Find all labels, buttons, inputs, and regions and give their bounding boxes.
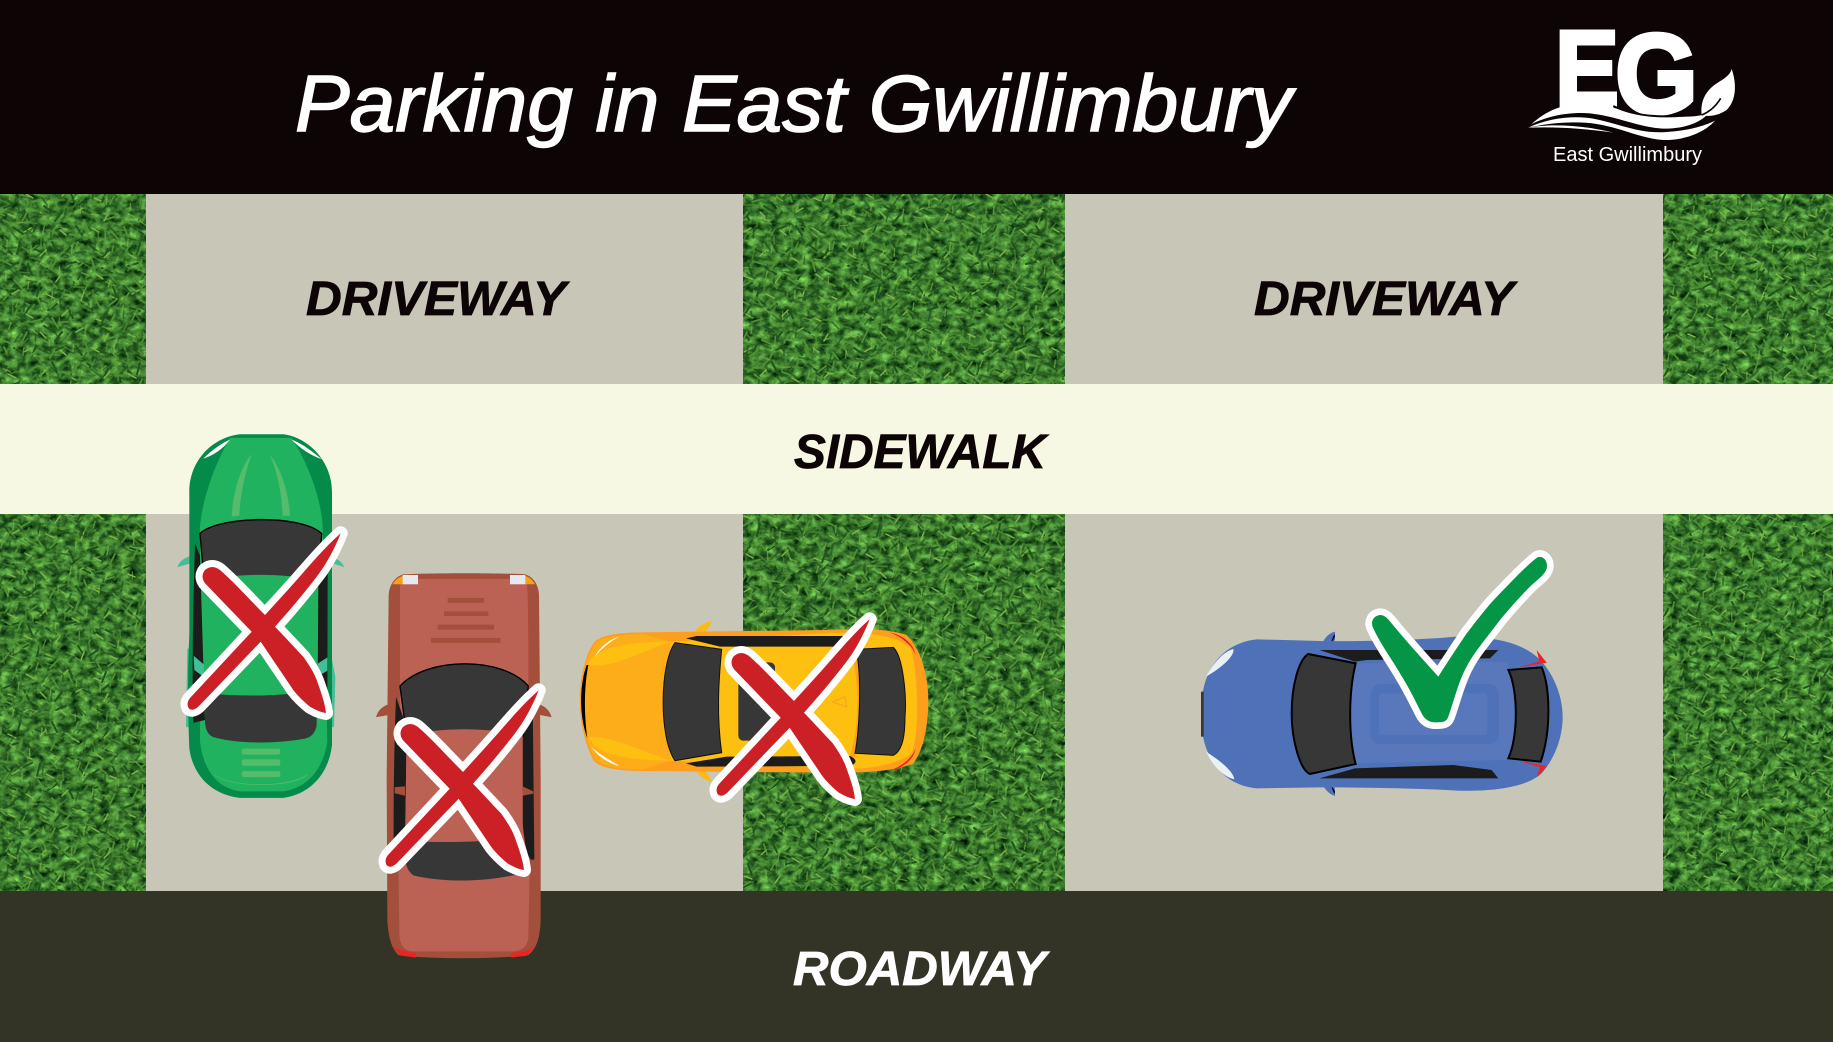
logo: East Gwillimbury: E [1555, 8, 1619, 128]
icon: red X over red car [386, 690, 539, 870]
roadway band [0, 891, 1833, 1042]
label: roadway: ROADWAY [793, 943, 1050, 996]
car: blue, correctly parked on the driveway [1201, 632, 1563, 796]
driveway surfaces [146, 194, 1663, 892]
label: left driveway: DRIVEWAY [306, 273, 570, 326]
icon: red X over green car [188, 533, 341, 713]
icon: green check mark over blue car [1372, 557, 1547, 722]
car: red, blocking sidewalk and road [376, 573, 552, 958]
logo: East Gwillimbury: East Gwillimbury [1553, 144, 1702, 166]
car: yellow, across the lawn [580, 622, 928, 782]
background: header band [0, 0, 1833, 194]
grass lawn areas [0, 194, 1833, 892]
logo: East Gwillimbury [1528, 8, 1735, 166]
sidewalk band [0, 384, 1833, 514]
icon: red X over yellow car [717, 619, 870, 799]
car: green, blocking the sidewalk [177, 434, 344, 798]
label: right driveway: DRIVEWAY [1254, 273, 1518, 326]
label: sidewalk: SIDEWALK [794, 426, 1049, 479]
title: Parking in East Gwillimbury [295, 59, 1297, 148]
logo: East Gwillimbury: G [1615, 11, 1698, 137]
